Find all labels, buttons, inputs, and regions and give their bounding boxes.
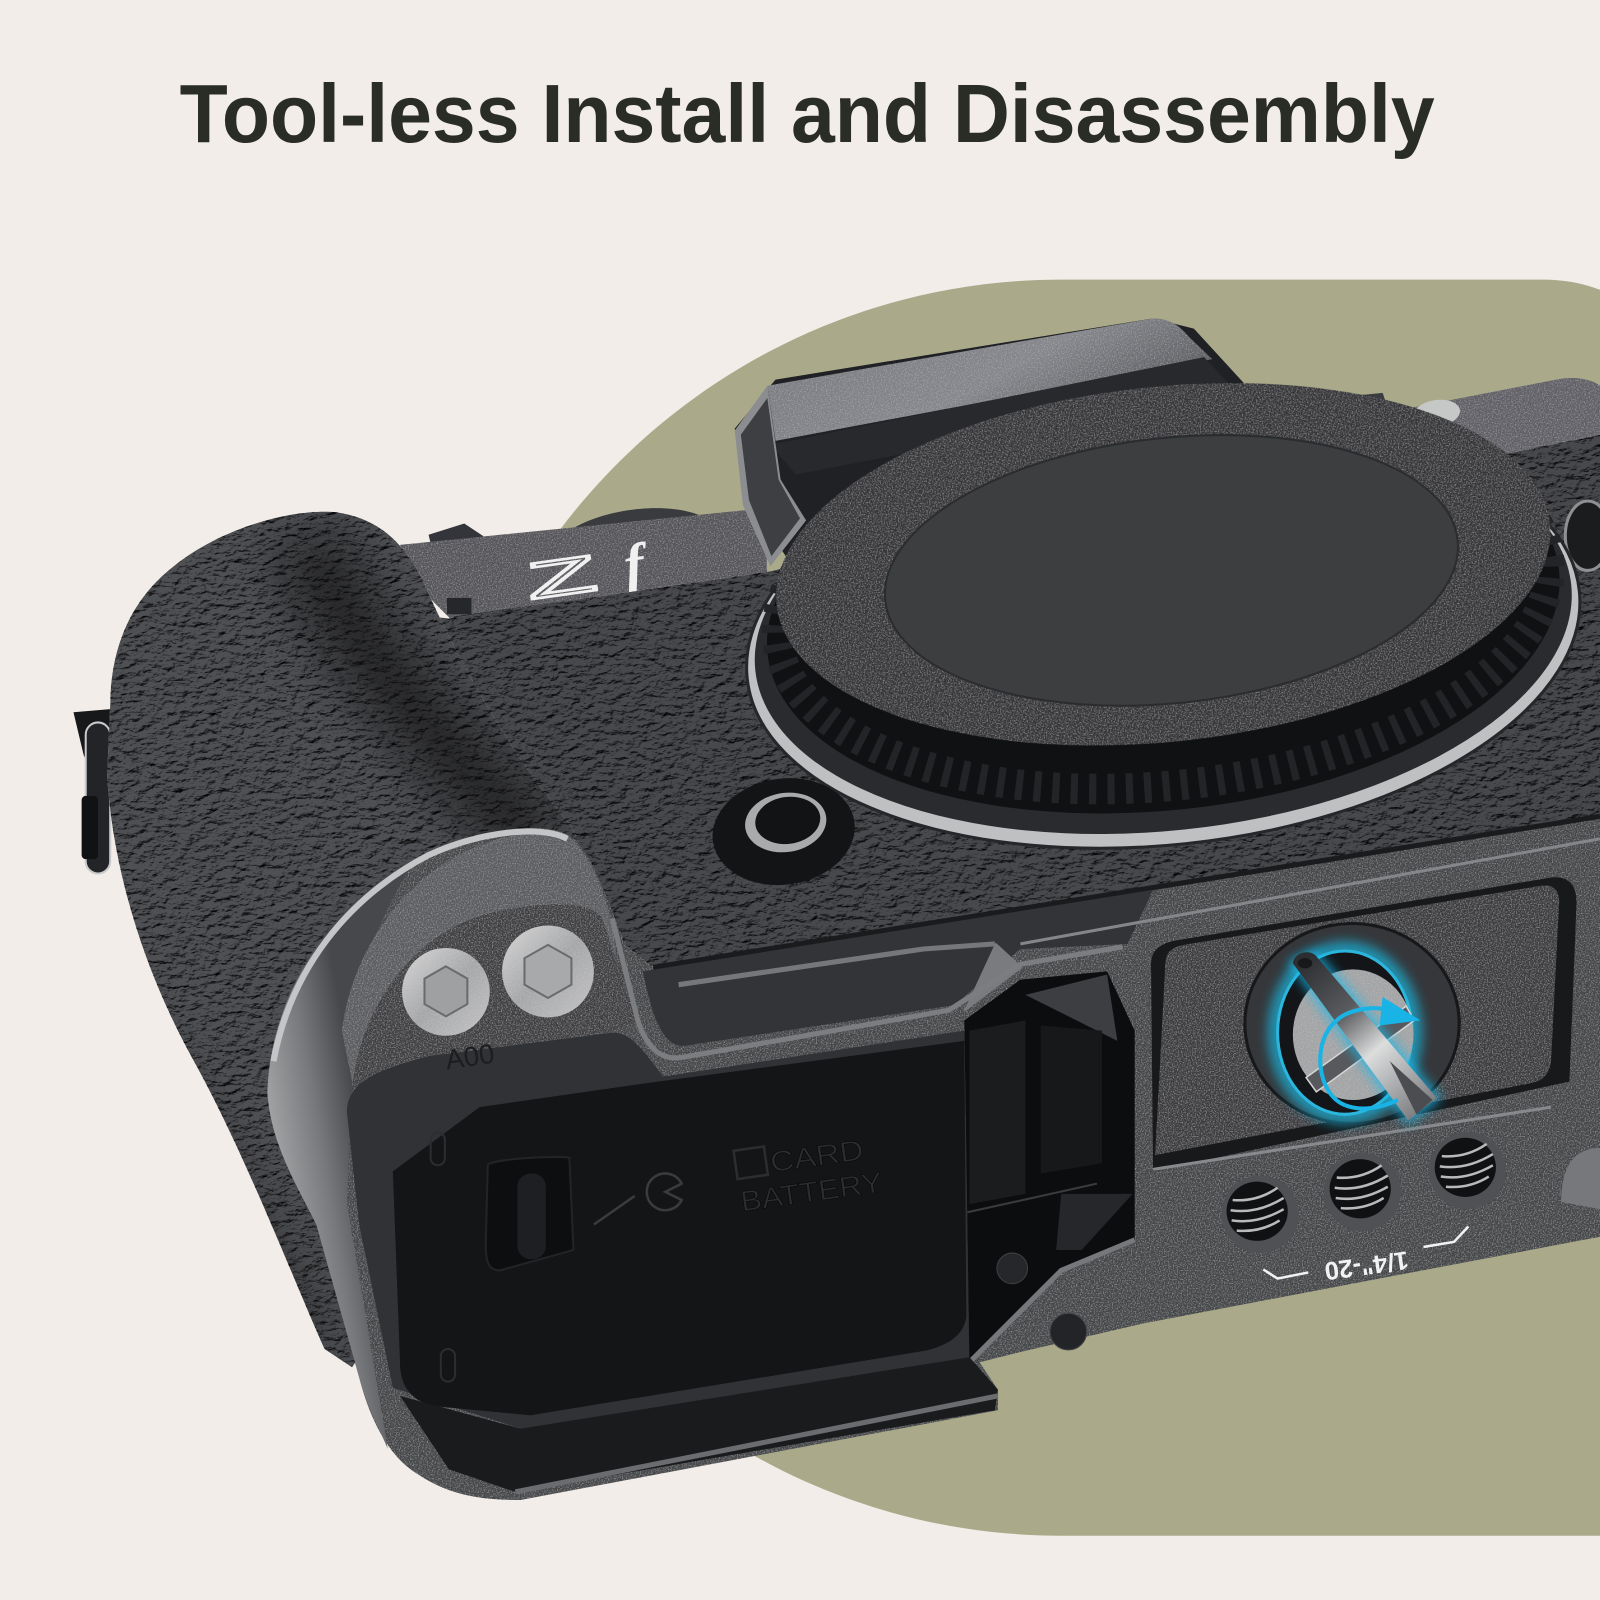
pull arrow mark — [594, 1173, 682, 1224]
door flange — [400, 1313, 1087, 1492]
card battery embossed label: CARD — [768, 1134, 866, 1179]
battery door recess — [347, 1031, 969, 1429]
Zf logo: f — [620, 530, 654, 599]
screw recess panel — [1151, 877, 1577, 1171]
hex screws — [402, 926, 594, 1036]
engraved A00 mark: A00 — [443, 1038, 496, 1075]
body cap top face — [758, 347, 1568, 782]
tripod thread holes — [1221, 1132, 1506, 1253]
open battery door — [393, 1041, 966, 1415]
screw surround recess — [352, 904, 638, 1102]
viewfinder hump — [735, 318, 1265, 571]
screwdriver tool with glow — [1293, 952, 1437, 1120]
lens mount silver ring — [725, 382, 1600, 887]
body cap inner disc — [871, 408, 1471, 732]
round button — [706, 769, 862, 894]
lens mount dark ring — [734, 383, 1592, 872]
thread size label — [1263, 1227, 1468, 1285]
title: Tool-less Install and Disassembly — [180, 67, 1435, 160]
thread size label: 1/4"-20 — [1323, 1245, 1410, 1285]
card battery embossed label — [734, 1131, 885, 1218]
side button right — [1565, 501, 1600, 570]
textured hand grip — [107, 512, 633, 1367]
top plate with dials — [400, 508, 767, 629]
camera illustration — [73, 318, 1600, 1500]
body cap ribbed side — [747, 374, 1580, 851]
quick-release screw — [1245, 923, 1459, 1123]
card battery embossed label: BATTERY — [739, 1167, 885, 1218]
battery compartment interior — [964, 971, 1135, 1362]
Zf logo: Z — [524, 544, 600, 610]
olive rounded backdrop — [434, 280, 1600, 1536]
door latch — [486, 1157, 573, 1270]
right top plate — [1311, 378, 1600, 467]
leather body panel — [388, 435, 1600, 967]
strap lug — [73, 709, 110, 873]
Zf logo — [523, 530, 654, 612]
blue rotation arrow — [1320, 997, 1420, 1109]
metal L-bracket — [267, 816, 1600, 1500]
side pad right — [1561, 1148, 1600, 1209]
bracket ridge channel — [612, 839, 1600, 1058]
